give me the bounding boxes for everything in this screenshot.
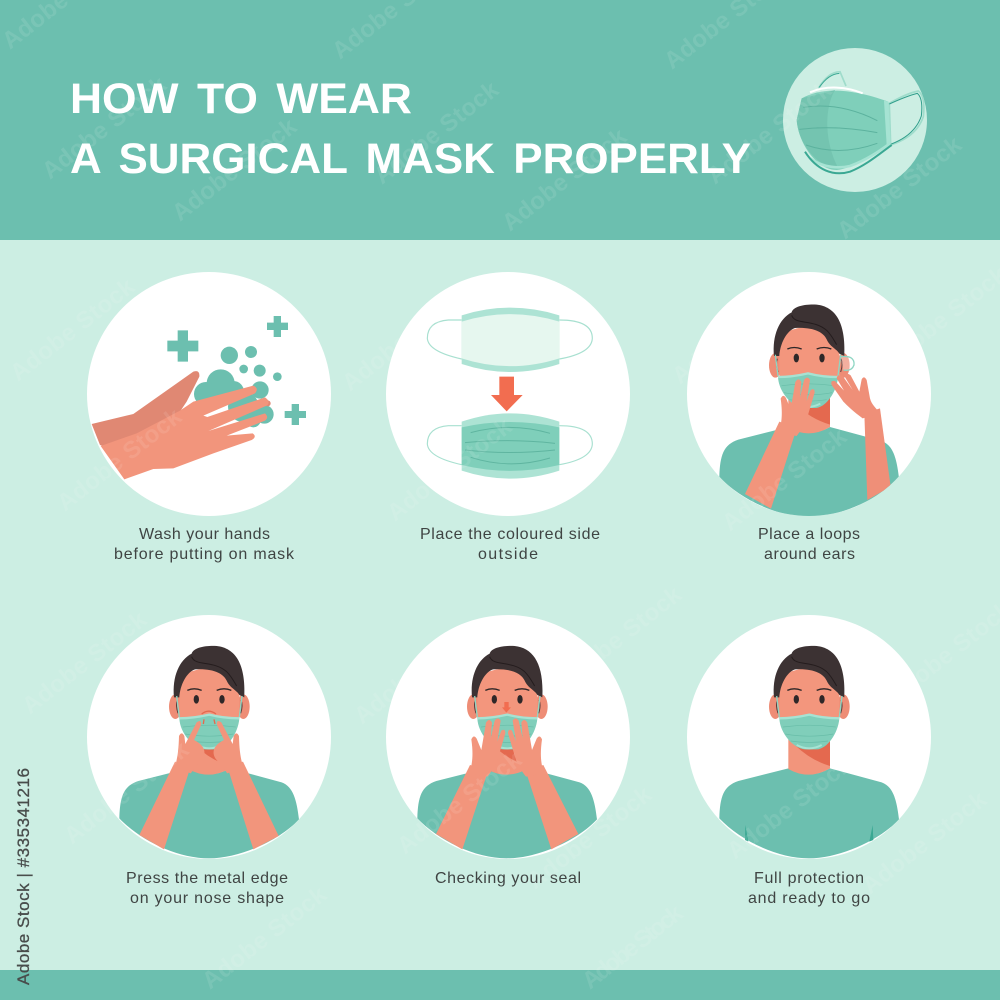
watermark: Adobe Stock (167, 113, 302, 227)
title (70, 75, 751, 183)
caption: wash hands (114, 526, 295, 563)
person (119, 646, 299, 858)
watermark: Adobe Stock (197, 881, 332, 995)
caption: loops (758, 526, 860, 563)
watermark: Adobe Stock (349, 616, 484, 730)
caption: full protection: Full protection (754, 870, 864, 887)
watermark: Adobe Stock (59, 736, 194, 850)
caption: loops: around ears (764, 546, 855, 563)
watermark: Adobe Stock (392, 746, 527, 860)
watermark: Adobe Stock (577, 899, 689, 995)
circle (687, 615, 931, 859)
stock id side text: Adobe Stock | #335341216 (14, 768, 33, 985)
panel: wash hands (87, 272, 331, 516)
icon: surgical mask badge (783, 48, 927, 192)
header band (0, 0, 1000, 240)
watermark: Adobe Stock (497, 123, 632, 237)
caption: coloured side: Place the coloured side (420, 526, 600, 543)
panel: full protection (687, 615, 931, 859)
caption: wash hands: before putting on mask (114, 546, 295, 563)
panel: coloured side (386, 272, 630, 516)
circle (386, 615, 630, 859)
caption: wash hands: Wash your hands (139, 526, 270, 543)
caption: metal edge: on your nose shape (130, 890, 284, 907)
watermark: Adobe Stock (52, 403, 187, 517)
watermark: Adobe Stock (667, 276, 802, 390)
caption: coloured side (420, 526, 600, 563)
watermark: Adobe Stock (717, 423, 852, 537)
caption: full protection (748, 870, 870, 907)
arrow (491, 377, 523, 411)
panel: press metal edge (87, 615, 331, 859)
person (719, 646, 899, 858)
watermark: Adobe Stock (552, 581, 687, 695)
caption: full protection: and ready to go (748, 890, 870, 907)
caption: loops: Place a loops (758, 526, 860, 543)
watermark: Adobe Stock (382, 413, 517, 527)
title: A SURGICAL MASK PROPERLY (70, 135, 751, 183)
panel: place loops (687, 272, 931, 517)
footer band (0, 970, 1000, 1000)
watermark: Adobe Stock (702, 76, 837, 190)
title: HOW TO WEAR (70, 75, 412, 123)
watermark: Adobe Stock (857, 786, 992, 900)
watermark: Adobe Stock (369, 76, 504, 190)
icon: plus signs (167, 316, 306, 425)
captions (114, 526, 870, 907)
person (719, 305, 899, 517)
icon: back hand (92, 371, 199, 448)
icon: front hand (101, 386, 269, 479)
caption: seal: Checking your seal (435, 870, 581, 887)
watermark: Adobe Stock (337, 283, 472, 397)
watermark: Adobe Stock (682, 616, 817, 730)
circle (87, 272, 331, 516)
caption: metal edge: Press the metal edge (126, 870, 288, 887)
watermark: Adobe Stock (17, 606, 152, 720)
icon: outer side mask (427, 413, 592, 479)
caption: coloured side: outside (478, 546, 538, 563)
watermark: Adobe Stock (5, 273, 140, 387)
icon: back hand fingertip (265, 400, 271, 406)
circle (386, 272, 630, 516)
icon: soap foam and bubbles (194, 346, 282, 427)
panel: check seal (386, 615, 630, 859)
caption: metal edge (126, 870, 288, 907)
watermark: Adobe Stock (522, 781, 657, 895)
circle (687, 272, 931, 516)
icon: inner side mask (427, 308, 592, 372)
circle (87, 615, 331, 859)
watermark: Adobe Stock (722, 751, 857, 865)
watermark: Adobe Stock (37, 71, 172, 185)
person (417, 646, 597, 858)
watermark: Adobe Stock (832, 131, 967, 245)
